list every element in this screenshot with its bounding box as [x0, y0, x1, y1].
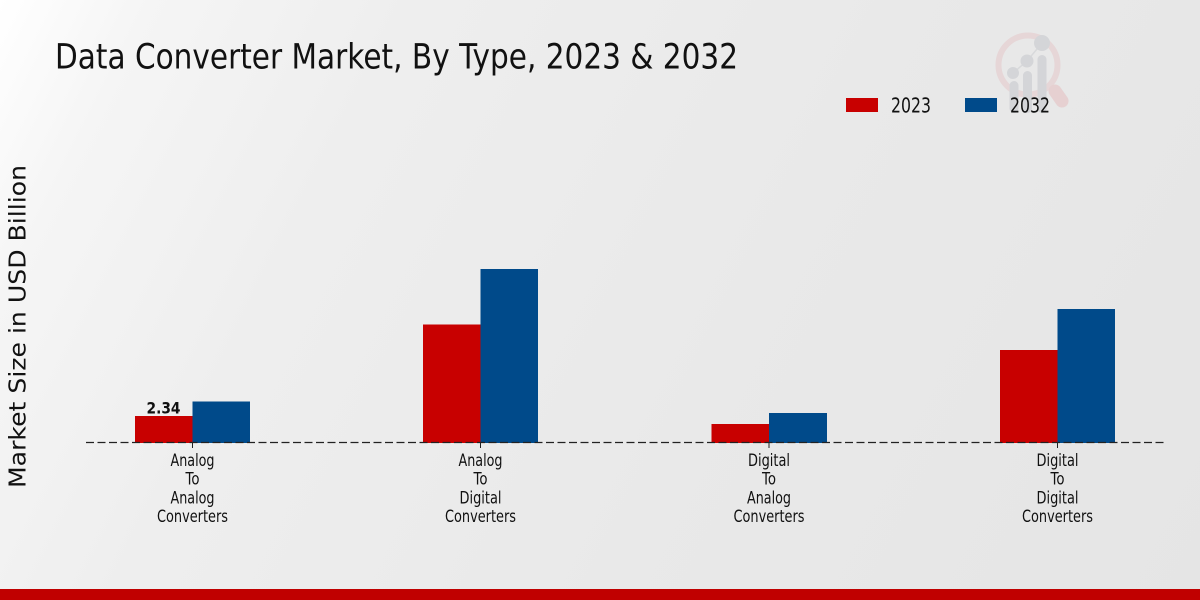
title: Data Converter Market, By Type, 2023 & 2032 — [55, 38, 738, 78]
category label: Analog To Analog Converters — [157, 443, 228, 526]
category label: Digital To Analog Converters — [734, 443, 804, 526]
y-axis label: Market Size in USD Billion — [4, 165, 32, 488]
category label: Analog To Digital Converters — [445, 443, 516, 526]
category label: Digital To Digital Converters: Digital — [1036, 451, 1078, 470]
bars: Digital To Analog Converters — [712, 413, 827, 443]
bars: Digital To Digital Converters — [1000, 309, 1115, 443]
category label: Analog To Analog Converters: Converters — [157, 507, 228, 526]
category label: Analog To Digital Converters: Analog — [458, 451, 502, 470]
bar chart — [86, 269, 1164, 443]
icon: logo watermark — [998, 35, 1062, 113]
legend item: 2023: 2023 — [891, 94, 931, 118]
category label: Analog To Analog Converters: Analog — [170, 451, 214, 470]
category label: Digital To Analog Converters: Digital — [748, 451, 790, 470]
category label: Analog To Digital Converters: To — [473, 470, 488, 488]
category label: Digital To Digital Converters: Digital — [1036, 488, 1078, 508]
category label: Digital To Analog Converters: Analog — [747, 488, 791, 508]
category label: Analog To Analog Converters: Analog — [170, 488, 214, 508]
category label: Digital To Analog Converters: Converters — [734, 507, 804, 526]
category label: Digital To Digital Converters — [1022, 443, 1093, 526]
legend item: 2032: 2032 — [1010, 94, 1050, 118]
legend item: 2023 — [846, 94, 931, 118]
footer bar — [0, 589, 1200, 600]
bars: Analog To Analog Converters — [135, 402, 250, 443]
category label: Analog To Digital Converters: Digital — [460, 488, 502, 508]
category label: Digital To Digital Converters: Converters — [1022, 507, 1093, 526]
category label: Digital To Digital Converters: To — [1050, 470, 1064, 488]
data label: 2.34: 2.34 — [146, 398, 180, 418]
category label: Digital To Analog Converters: To — [761, 470, 776, 488]
legend item: 2032 — [965, 94, 1050, 118]
bars: Analog To Digital Converters — [423, 269, 538, 443]
legend — [846, 94, 1050, 118]
x-axis baseline — [86, 442, 1164, 444]
category label: Analog To Analog Converters: To — [185, 470, 200, 488]
category label: Analog To Digital Converters: Converters — [445, 507, 516, 526]
